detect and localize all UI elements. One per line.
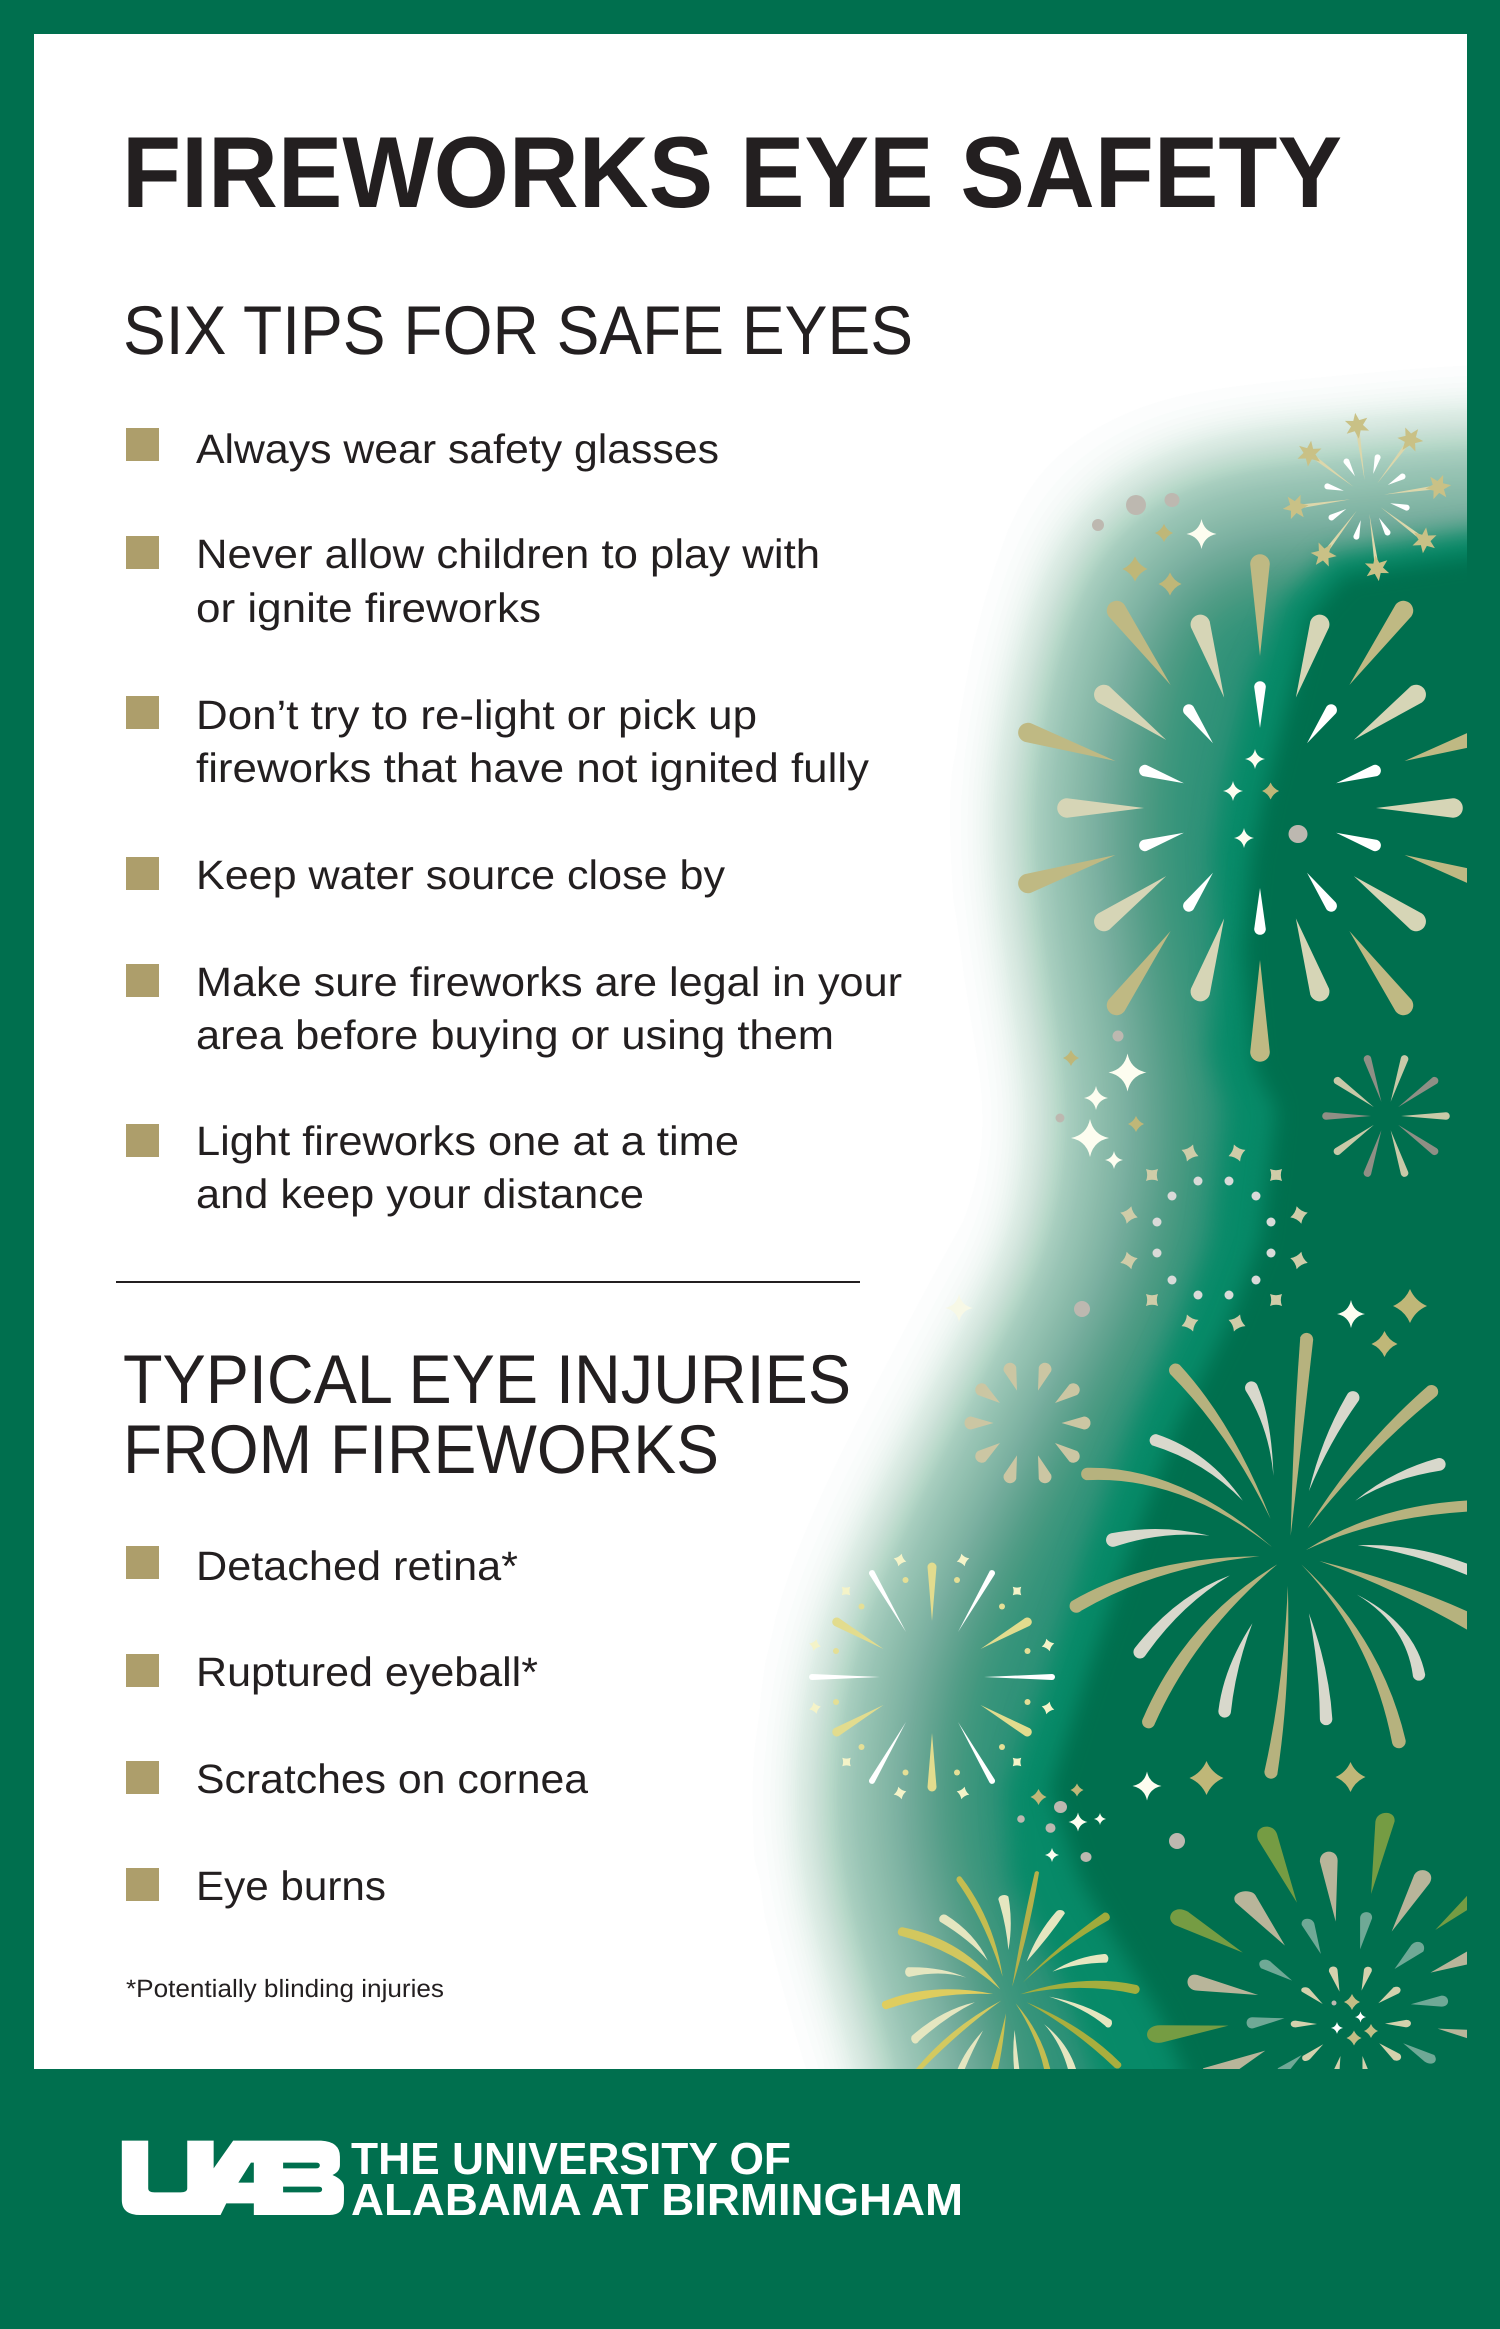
tip 6: and keep your distance (196, 1171, 644, 1217)
heading: six tips: SIX TIPS FOR SAFE EYES (123, 292, 913, 369)
firework: bottom yellow curved burst (882, 1871, 1140, 2070)
list: six tips (126, 426, 902, 1217)
firework: large curved burst (1070, 1333, 1473, 1779)
tip 2: Never allow children to play with (196, 531, 820, 577)
list: injuries (126, 1543, 588, 1909)
injury 2: Ruptured eyeball* (196, 1649, 538, 1695)
university name: THE UNIVERSITY OF (351, 2133, 791, 2184)
tip 6: Light fireworks one at a time (196, 1118, 739, 1164)
firework: top right star burst (1281, 411, 1453, 583)
footer logo (122, 2133, 963, 2225)
tip 3: Don’t try to re-light or pick up (196, 692, 757, 738)
sparkles below large burst (1017, 1761, 1366, 1862)
injury 3: Scratches on cornea (196, 1756, 588, 1802)
heading: typical eye injuries: FROM FIREWORKS (123, 1411, 719, 1488)
tip 5: Make sure fireworks are legal in your (196, 959, 902, 1005)
heading: typical eye injuries: TYPICAL EYE INJURIES (123, 1341, 851, 1418)
tip 3 (126, 692, 870, 791)
sparkles at bottom right burst centre (1331, 1994, 1378, 2046)
tip 4: Keep water source close by (196, 852, 726, 898)
university name: ALABAMA AT BIRMINGHAM (351, 2174, 963, 2225)
university name (351, 2133, 963, 2225)
firework: main radial burst (1016, 554, 1500, 1062)
sparkles between fireworks (1056, 1030, 1146, 1169)
heading: typical eye injuries (123, 1341, 851, 1488)
firework: small tan burst (964, 1361, 1090, 1485)
injury 4: Eye burns (196, 1863, 386, 1909)
footnote: *Potentially blinding injuries (126, 1975, 444, 2003)
tip 5 (126, 959, 902, 1058)
tip 1: Always wear safety glasses (196, 426, 719, 472)
tip 3: fireworks that have not ignited fully (196, 745, 870, 791)
sparkles above main firework (1092, 493, 1216, 596)
sparkles right of dot ring (945, 1289, 1427, 1357)
firework: left burst with white and yellow rays (808, 1552, 1056, 1801)
tip 2 (126, 531, 820, 631)
firework: grey and cream burst (1322, 1054, 1450, 1178)
tip 2: or ignite fireworks (196, 585, 541, 631)
tip 5: area before buying or using them (196, 1012, 834, 1058)
tip 6 (126, 1118, 739, 1217)
injury 1: Detached retina* (196, 1543, 518, 1589)
sparkles at main firework centre (1223, 749, 1308, 848)
green gradient band (881, 495, 1500, 2329)
firework: bottom right burst (1147, 1813, 1473, 2070)
firework: dot ring (1118, 1141, 1310, 1335)
title: FIREWORKS EYE SAFETY (122, 117, 1342, 229)
icon: UAB monogram (122, 2141, 344, 2215)
